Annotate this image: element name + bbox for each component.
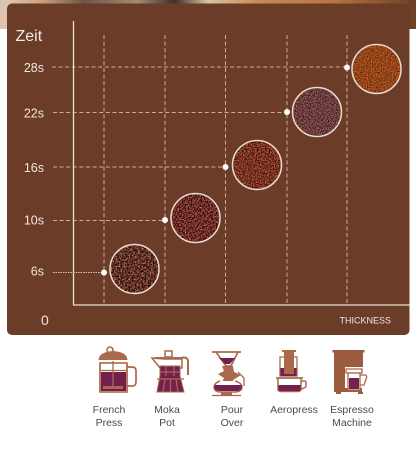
icon: moka pot	[152, 351, 188, 392]
label: Moka Pot: Pot	[159, 417, 175, 429]
label: Pour Over: Over	[221, 417, 244, 429]
coffee sample: fine, 22s	[292, 87, 342, 137]
y axis labels	[24, 61, 44, 278]
coffee sample: medium, 16s	[232, 140, 282, 190]
icon: espresso machine	[332, 350, 367, 394]
origin label: 0	[41, 312, 49, 328]
label: Moka Pot: Moka	[154, 404, 180, 416]
coffee sample: coarsest, 6s	[110, 244, 159, 294]
grid lines	[52, 35, 347, 305]
label: French Press: French	[93, 404, 125, 416]
y axis labels: 6s	[31, 264, 44, 278]
label: French Press: Press	[96, 417, 122, 429]
y axis labels: 16s	[24, 161, 44, 175]
chart: grind size versus brew time	[16, 21, 410, 328]
icon: french press	[98, 347, 136, 392]
y axis labels: 10s	[24, 214, 44, 228]
label: Aeropress: Aeropress	[270, 404, 318, 416]
data points	[101, 64, 350, 276]
label: Espresso Machine: Machine	[332, 417, 372, 429]
icon: aeropress	[276, 350, 306, 392]
icon: pour over	[212, 352, 244, 396]
x axis title: THICKNESS	[340, 316, 391, 326]
axes	[74, 21, 410, 305]
coffee sample: coarse, 10s	[171, 193, 220, 243]
y axis labels: 28s	[24, 61, 44, 75]
label: Espresso Machine: Espresso	[330, 404, 374, 416]
y axis title: Zeit	[16, 28, 43, 45]
coffee sample: finest, 28s	[352, 44, 402, 94]
label: Pour Over: Pour	[221, 404, 244, 416]
panel: chart background	[7, 4, 410, 335]
y axis labels: 22s	[24, 106, 44, 120]
photo strip behind panel	[0, 0, 416, 29]
